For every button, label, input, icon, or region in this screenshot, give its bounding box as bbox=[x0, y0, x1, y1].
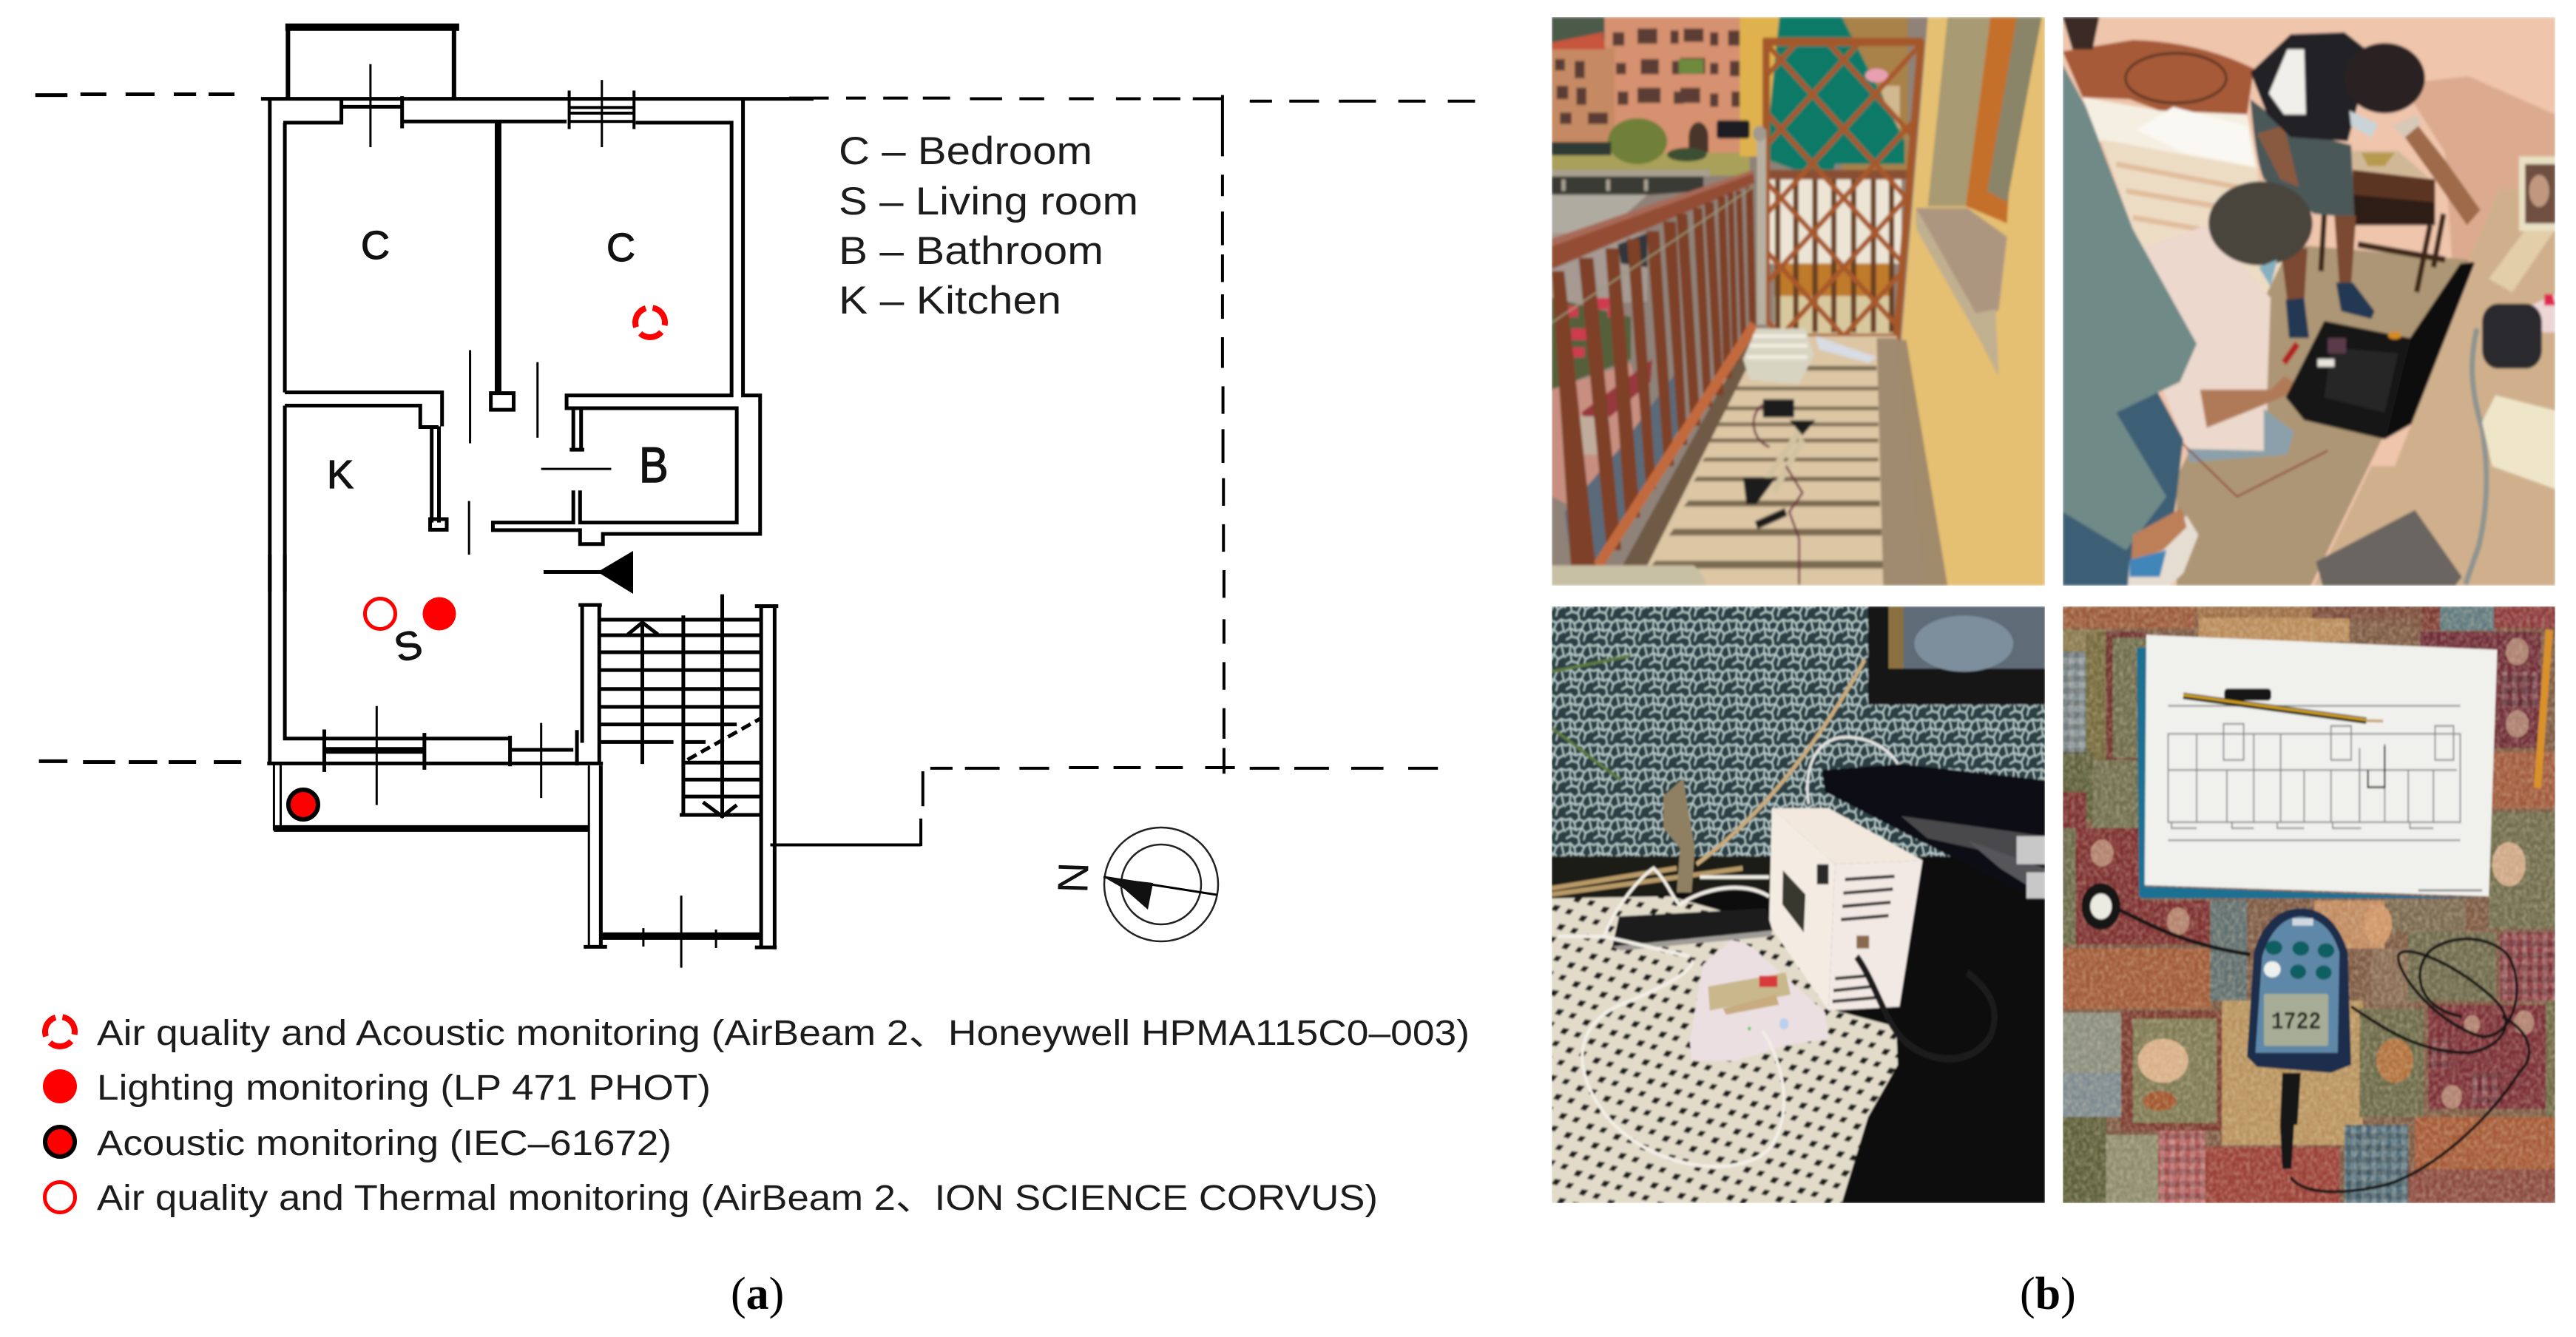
yellow pencil and eraser bbox=[2183, 688, 2383, 721]
caption b: (b) bbox=[2020, 1269, 2076, 1319]
balcony floor with shadow stripes bbox=[1621, 336, 1947, 586]
equipment on floor bbox=[1743, 328, 1876, 584]
compass: N bbox=[1048, 862, 1098, 894]
floor plan paper bbox=[2145, 635, 2497, 896]
legend text: air quality and acoustic: Air quality and Acoustic monitoring (AirBeam 2、Honeywell HPMA115C0–003) bbox=[97, 1014, 1470, 1053]
plant leaves bbox=[1552, 656, 1631, 780]
blue folder bbox=[2137, 648, 2482, 898]
bed and pillows bbox=[2083, 98, 2318, 305]
kneeling person bbox=[2140, 181, 2313, 462]
compass bbox=[1048, 827, 1218, 941]
woven texture bbox=[2063, 606, 2555, 1203]
open black equipment case bbox=[2166, 262, 2475, 497]
room key: S – Living room bbox=[839, 180, 1138, 223]
marker: air quality and thermal bbox=[365, 599, 395, 629]
room letter: B: B bbox=[639, 437, 669, 493]
walls and stairs of lower apartment bbox=[38, 555, 778, 968]
patchwork cloth bbox=[2063, 606, 2555, 1203]
yellow back wall and teal curtain bbox=[1740, 17, 1908, 183]
entrance arrow bbox=[544, 551, 633, 594]
room letter: C left: C bbox=[361, 223, 390, 268]
marker: lighting bbox=[423, 598, 456, 630]
exterior wall and window bbox=[1901, 17, 2045, 586]
legend icon: open ring bbox=[44, 1182, 75, 1213]
white charging cables bbox=[1558, 868, 1784, 1166]
check texture bbox=[2063, 651, 2555, 1203]
white light sensor bbox=[2081, 883, 2251, 955]
floor tiles bbox=[2177, 244, 2469, 586]
AirBeam power bank bbox=[1690, 941, 1828, 1060]
standing man bbox=[2251, 33, 2481, 338]
tree and garden bbox=[1552, 118, 1750, 194]
room key: C – Bedroom bbox=[839, 129, 1092, 173]
photo: balcony with instruments bbox=[1552, 17, 2045, 586]
CORVUS white box bbox=[1769, 808, 1995, 1059]
street with flowers bbox=[1552, 194, 1683, 561]
room key: B – Bathroom bbox=[839, 229, 1103, 273]
balcony railing bbox=[1552, 170, 1757, 566]
background buildings bbox=[1552, 17, 1743, 158]
hair top left bbox=[2063, 17, 2099, 50]
probe connector bbox=[2280, 1073, 2301, 1169]
room letter: K: K bbox=[327, 453, 354, 497]
walls of upper apartment bbox=[36, 24, 814, 592]
legend text: air quality and thermal: Air quality and Thermal monitoring (AirBeam 2、ION SCIENCE CORVUS) bbox=[97, 1179, 1378, 1218]
orange pencil bbox=[2538, 629, 2549, 788]
room letter: C right: C bbox=[606, 226, 635, 270]
tablecloth flowers bbox=[2091, 638, 2534, 1109]
photo: researchers setting up equipment in bedroom bbox=[2063, 17, 2555, 586]
instrument post and microphone bbox=[1717, 121, 1766, 325]
room letter: S: S bbox=[390, 621, 427, 671]
brass statuette bbox=[1663, 778, 1695, 893]
photo: CORVUS and AirBeam instruments on lace doily bbox=[1552, 606, 2045, 1203]
caption a: (a) bbox=[731, 1269, 784, 1319]
gate with lattice bbox=[1761, 34, 1926, 342]
shaded wall corner bbox=[2401, 76, 2555, 268]
shelf and bamboo bbox=[1552, 660, 1898, 898]
person in denim jacket bbox=[2063, 65, 2198, 586]
laptop stack bbox=[1822, 764, 2045, 904]
bedside table bbox=[2321, 151, 2445, 292]
marker: air quality and acoustic bbox=[633, 305, 667, 339]
headboard bbox=[2063, 40, 2254, 115]
floor plan bbox=[36, 27, 1475, 968]
smartphone bbox=[1612, 908, 1772, 950]
wardrobe door and dresser bbox=[2314, 157, 2555, 586]
legend text: acoustic: Acoustic monitoring (IEC–61672) bbox=[97, 1124, 672, 1163]
legend bbox=[43, 1014, 1470, 1218]
photo: lux meter and plan on patchwork tablecloth bbox=[2063, 606, 2555, 1203]
LP 471 PHOT lux meter: 1722 bbox=[2271, 1009, 2321, 1037]
room key: K – Kitchen bbox=[839, 279, 1061, 322]
legend icon: black ringed dot bbox=[45, 1127, 75, 1157]
crackle wallpaper bbox=[1552, 606, 2045, 879]
legend icon: dashed ring bbox=[43, 1015, 77, 1049]
room key bbox=[839, 129, 1138, 322]
picture frame bbox=[1868, 606, 2045, 705]
legend text: lighting: Lighting monitoring (LP 471 PHOT) bbox=[97, 1069, 711, 1108]
black cable loops bbox=[2291, 939, 2529, 1191]
lace doily bbox=[1552, 896, 1898, 1203]
LP 471 PHOT lux meter bbox=[2247, 908, 2351, 1073]
chair edge bbox=[1552, 566, 1705, 586]
site boundary dashed lines bbox=[771, 95, 1475, 846]
marker: acoustic bbox=[288, 790, 318, 819]
legend icon: red dot bbox=[43, 1069, 77, 1103]
black table bbox=[1552, 856, 2045, 1203]
